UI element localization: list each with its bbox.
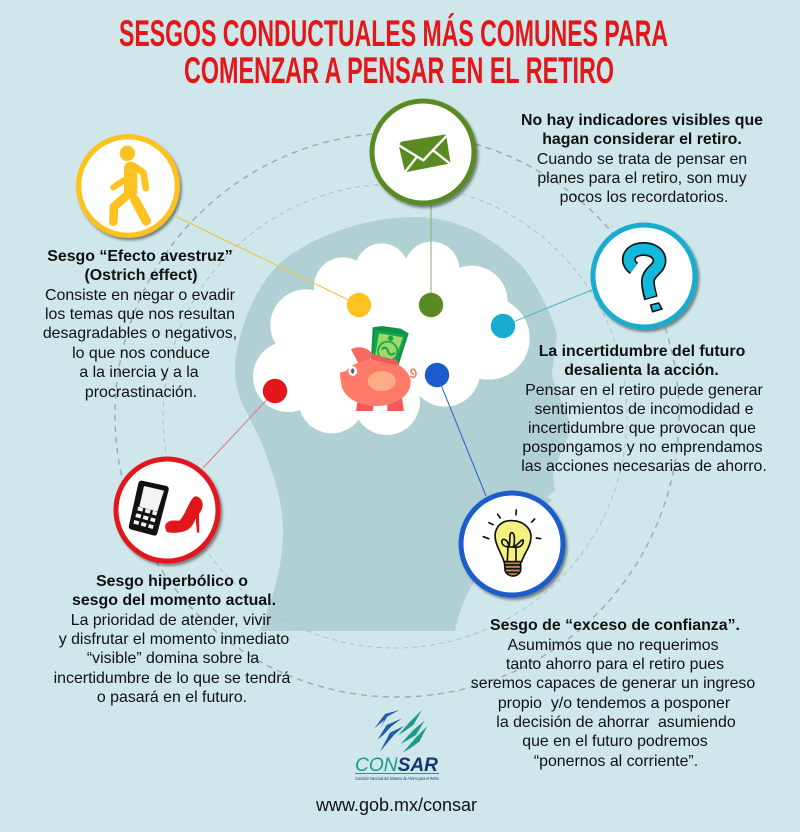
text block: indicadores visibles: Cuando se trata de pensar en: [537, 151, 747, 168]
logo: CONSAR: [355, 710, 439, 781]
text block: indicadores visibles: [521, 112, 763, 206]
icon: walking person: [113, 146, 146, 222]
text block: efecto avestruz: lo que nos conduce: [72, 345, 210, 362]
website url: www.gob.mx/consar: [315, 795, 477, 815]
text block: incertidumbre del futuro: Pensar en el retiro puede generar: [525, 382, 764, 399]
icon: logo strokes: [355, 710, 439, 774]
text block: sesgo hiperbolico: La prioridad de atender, vivir: [71, 612, 272, 629]
icon: piggy bank with money: [340, 326, 416, 411]
node dots: [263, 293, 515, 403]
panel: green envelope icon: [372, 101, 474, 203]
logo wordmark: CONSAR: [355, 755, 438, 776]
panel: red phone and shoe icon: [116, 459, 218, 561]
dashed orbit rings: [115, 133, 679, 697]
text block: exceso de confianza: Asumimos que no requerimos: [507, 637, 719, 654]
text block: indicadores visibles: No hay indicadores visibles que: [521, 112, 763, 129]
icon: question mark: [629, 249, 662, 312]
text block: efecto avestruz: [43, 248, 237, 401]
thought cloud: [253, 242, 530, 435]
text block: efecto avestruz: los temas que nos resultan: [45, 306, 235, 323]
text block: efecto avestruz: (Ostrich effect): [84, 267, 198, 284]
text block: indicadores visibles: hagan considerar el retiro.: [542, 131, 742, 148]
text block: sesgo hiperbolico: sesgo del momento actual.: [72, 592, 276, 609]
text block: exceso de confianza: [471, 617, 755, 770]
text block: incertidumbre del futuro: pospongamos y no emprendamos: [522, 439, 763, 456]
text block: incertidumbre del futuro: las acciones necesarias de ahorro.: [521, 458, 767, 475]
text block: sesgo hiperbolico: y disfrutar el momento inmediato: [59, 631, 289, 648]
text block: sesgo hiperbolico: Sesgo hiperbólico o: [96, 573, 248, 590]
panel: yellow walking icon: [79, 137, 177, 235]
text block: exceso de confianza: propio y/o tendemos a posponer: [498, 695, 731, 712]
text block: exceso de confianza: tanto ahorro para el retiro pues: [506, 656, 724, 673]
panel: blue light bulb icon: [461, 493, 563, 595]
text block: incertidumbre del futuro: sentimientos de incomodidad e: [534, 401, 754, 418]
panel: teal question mark icon: [593, 225, 695, 327]
text block: efecto avestruz: desagradables o negativos,: [43, 325, 237, 342]
text block: incertidumbre del futuro: La incertidumbre del futuro: [539, 343, 746, 360]
text block: incertidumbre del futuro: [521, 343, 767, 475]
text block: sesgo hiperbolico: incertidumbre de lo que se tendrá: [54, 670, 291, 687]
text block: exceso de confianza: seremos capaces de generar un ingreso: [471, 675, 755, 692]
title: [119, 13, 668, 91]
icon: light bulb: [483, 510, 541, 576]
text block: exceso de confianza: “ponernos al corriente”.: [534, 753, 698, 770]
head silhouette: [235, 217, 570, 631]
icon: red high heel: [165, 496, 203, 533]
text block: sesgo hiperbolico: o pasará en el futuro.: [97, 689, 247, 706]
text block: efecto avestruz: procrastinación.: [85, 384, 197, 401]
text block: exceso de confianza: la decisión de ahorrar asumiendo: [496, 714, 736, 731]
text block: incertidumbre del futuro: incertidumbre que provocan que: [528, 420, 756, 437]
icon: envelope: [397, 134, 451, 173]
text block: sesgo hiperbolico: [54, 573, 291, 706]
icon: mobile phone: [129, 481, 169, 536]
text block: indicadores visibles: planes para el retiro, son muy: [537, 170, 747, 187]
text block: efecto avestruz: Consiste en negar o evadir: [45, 287, 236, 304]
text block: indicadores visibles: pocos los recordatorios.: [560, 189, 728, 206]
text block: exceso de confianza: Sesgo de “exceso de confianza”.: [490, 617, 740, 634]
text block: incertidumbre del futuro: desalienta la acción.: [564, 362, 719, 379]
connector lines: [177, 205, 592, 496]
text block: efecto avestruz: a la inercia y a la: [79, 364, 199, 381]
text block: sesgo hiperbolico: “visible” domina sobre la: [87, 650, 259, 667]
text block: efecto avestruz: Sesgo “Efecto avestruz”: [47, 248, 233, 265]
logo tagline: Comisión Nacional del Sistema de Ahorro para el Retiro: [355, 776, 439, 781]
text block: exceso de confianza: que en el futuro podremos: [522, 733, 708, 750]
